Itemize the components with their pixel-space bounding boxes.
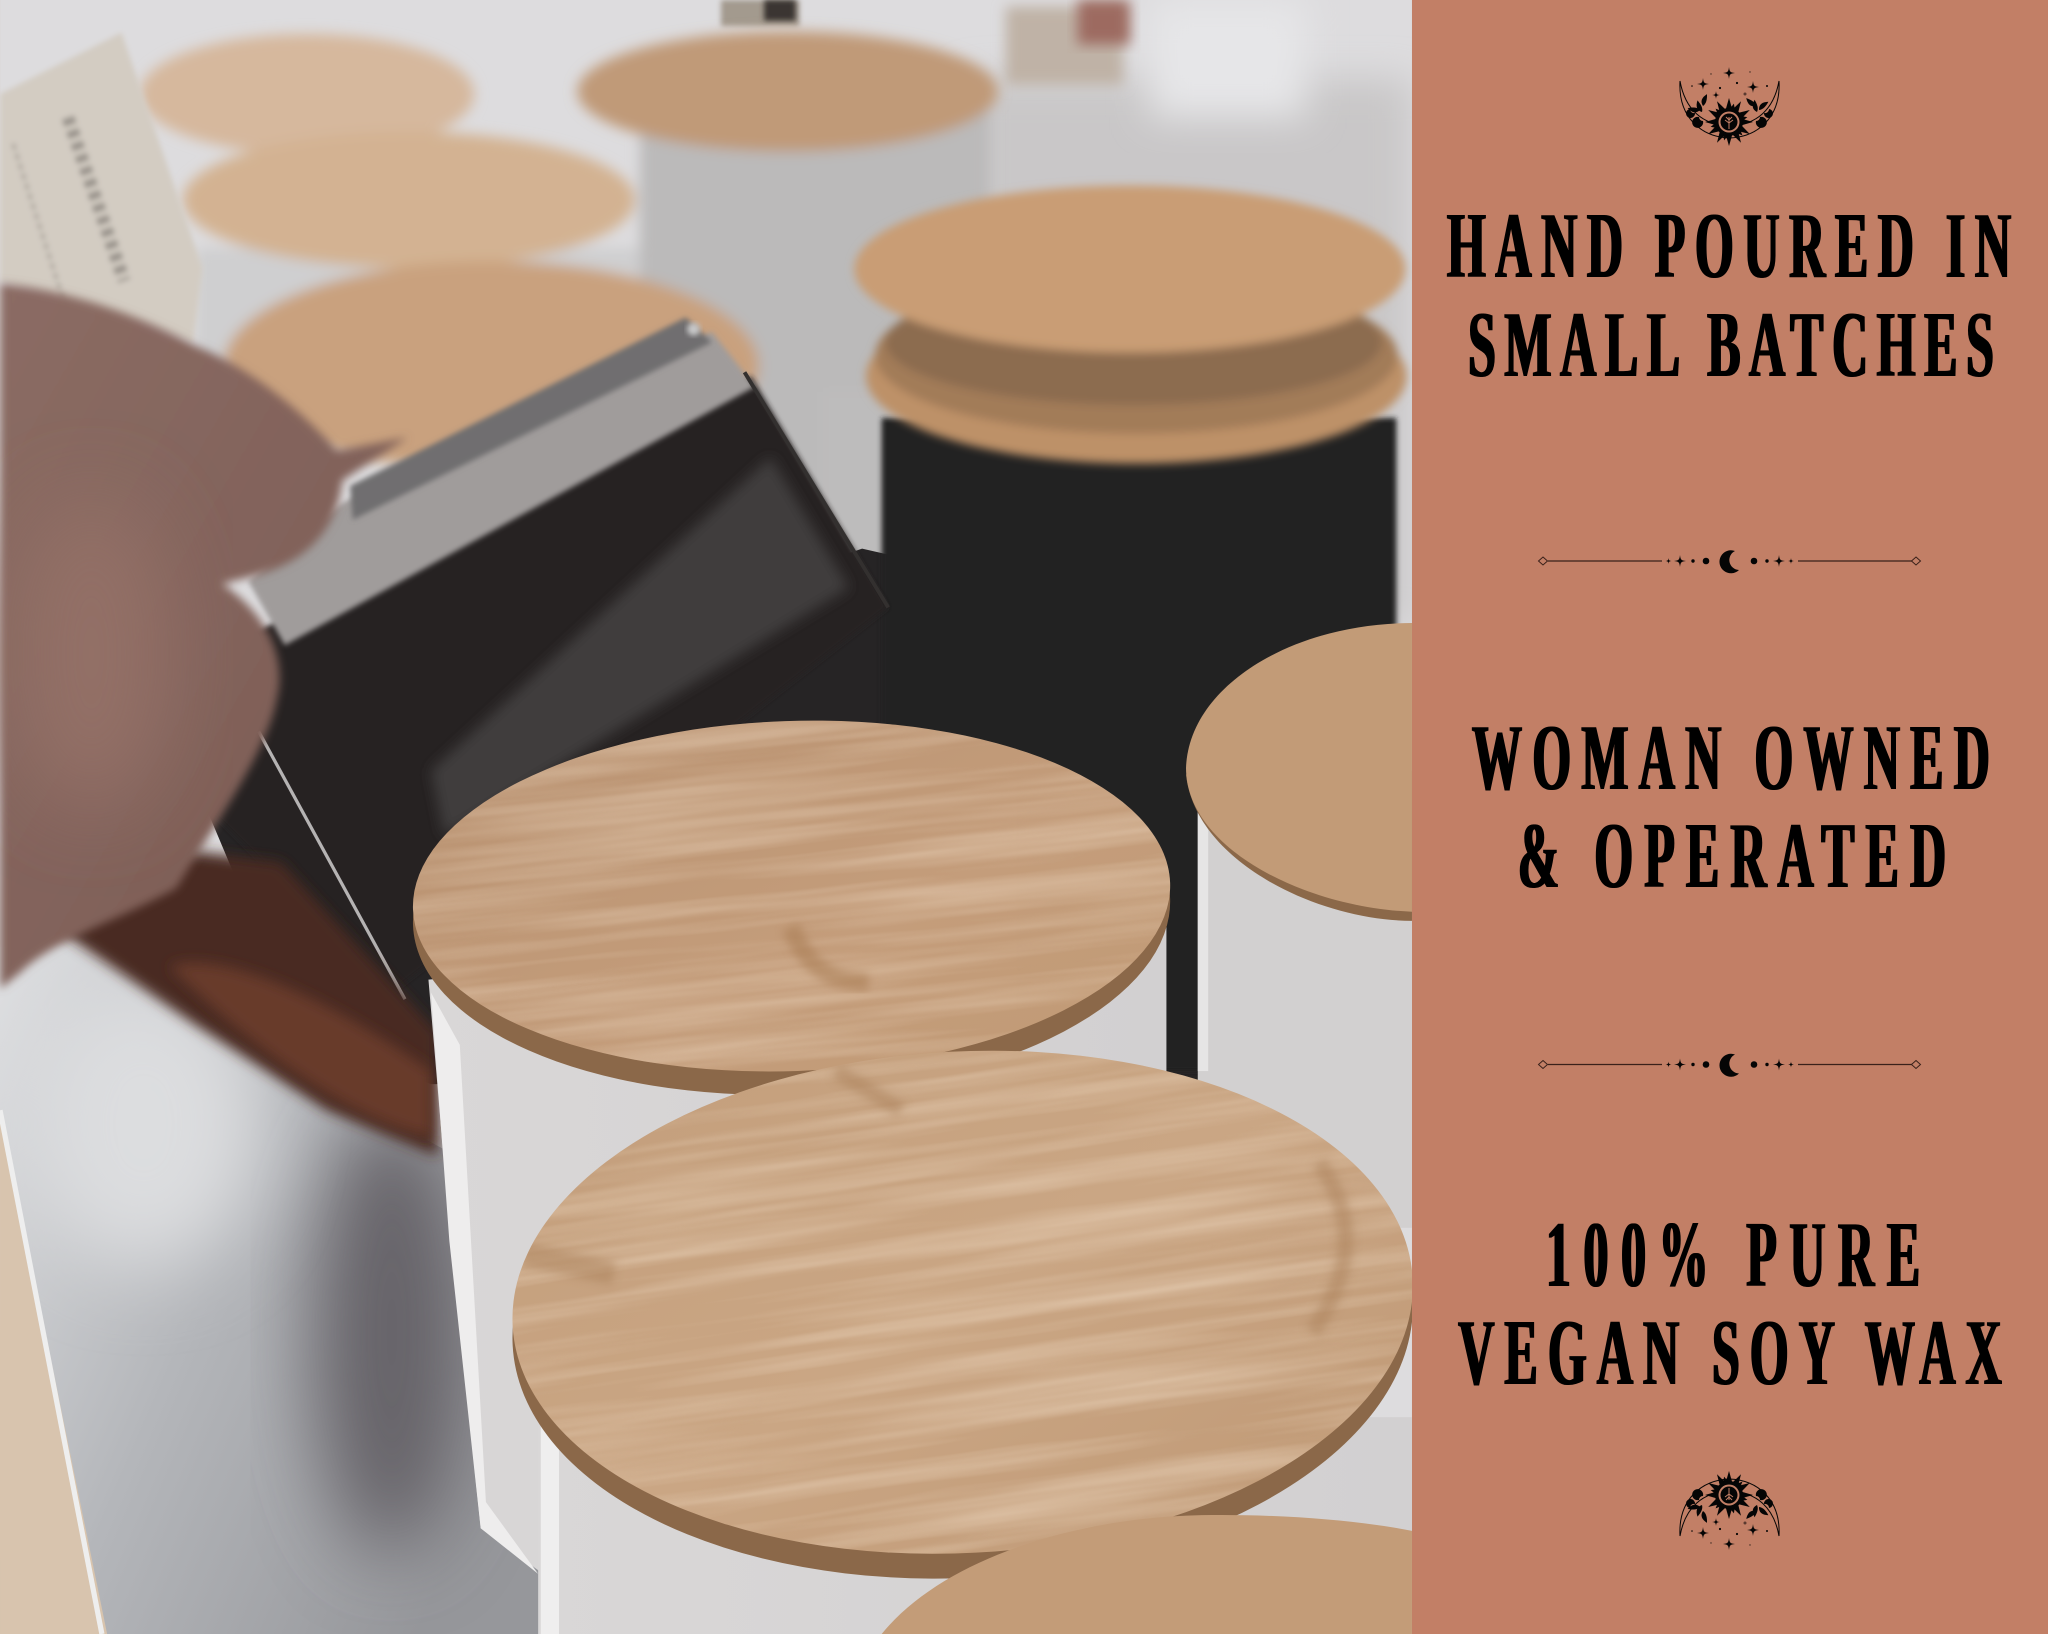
heading: 100% pure vegan soy wax: 100% PURE [1546,1204,1920,1307]
wood grain large lid [512,1052,1412,1554]
background wall [0,0,1412,1634]
divider: moon and stars, lower [1538,1054,1920,1077]
white jar right [1186,623,1412,1228]
heading: 100% pure vegan soy wax: VEGAN SOY WAX [1458,1302,2002,1405]
hand holding pitcher [0,283,438,1156]
dark candle jar with stacked lids [854,185,1407,1071]
wood grain front lid [413,720,1170,1068]
white jar centre [412,720,1170,1574]
icon: crescent moon with sunflower, top [1680,67,1779,146]
icon: crescent moon with sunflower, bottom [1680,1471,1779,1550]
heading: hand poured in small batches: SMALL BATCHES [1468,294,1994,397]
heading: woman owned and operated [1472,707,1990,908]
pouring pitcher [196,317,888,999]
white jar front [512,1050,1412,1634]
heading: woman owned and operated: WOMAN OWNED [1472,707,1990,810]
heading: 100% pure vegan soy wax [1458,1204,2002,1405]
blurred back lids and jars [140,31,998,601]
divider: moon and stars, upper [1538,550,1920,573]
heading: woman owned and operated: & OPERATED [1518,805,1946,908]
metal table [0,938,555,1634]
heading: hand poured in small batches [1447,195,2011,397]
bottom lid [882,1515,1412,1634]
heading: hand poured in small batches: HAND POURED IN [1447,195,2011,298]
paper label card [0,33,202,342]
dark space between jars [196,549,1202,1084]
photo: pouring wax into candle jars [0,0,1412,1634]
